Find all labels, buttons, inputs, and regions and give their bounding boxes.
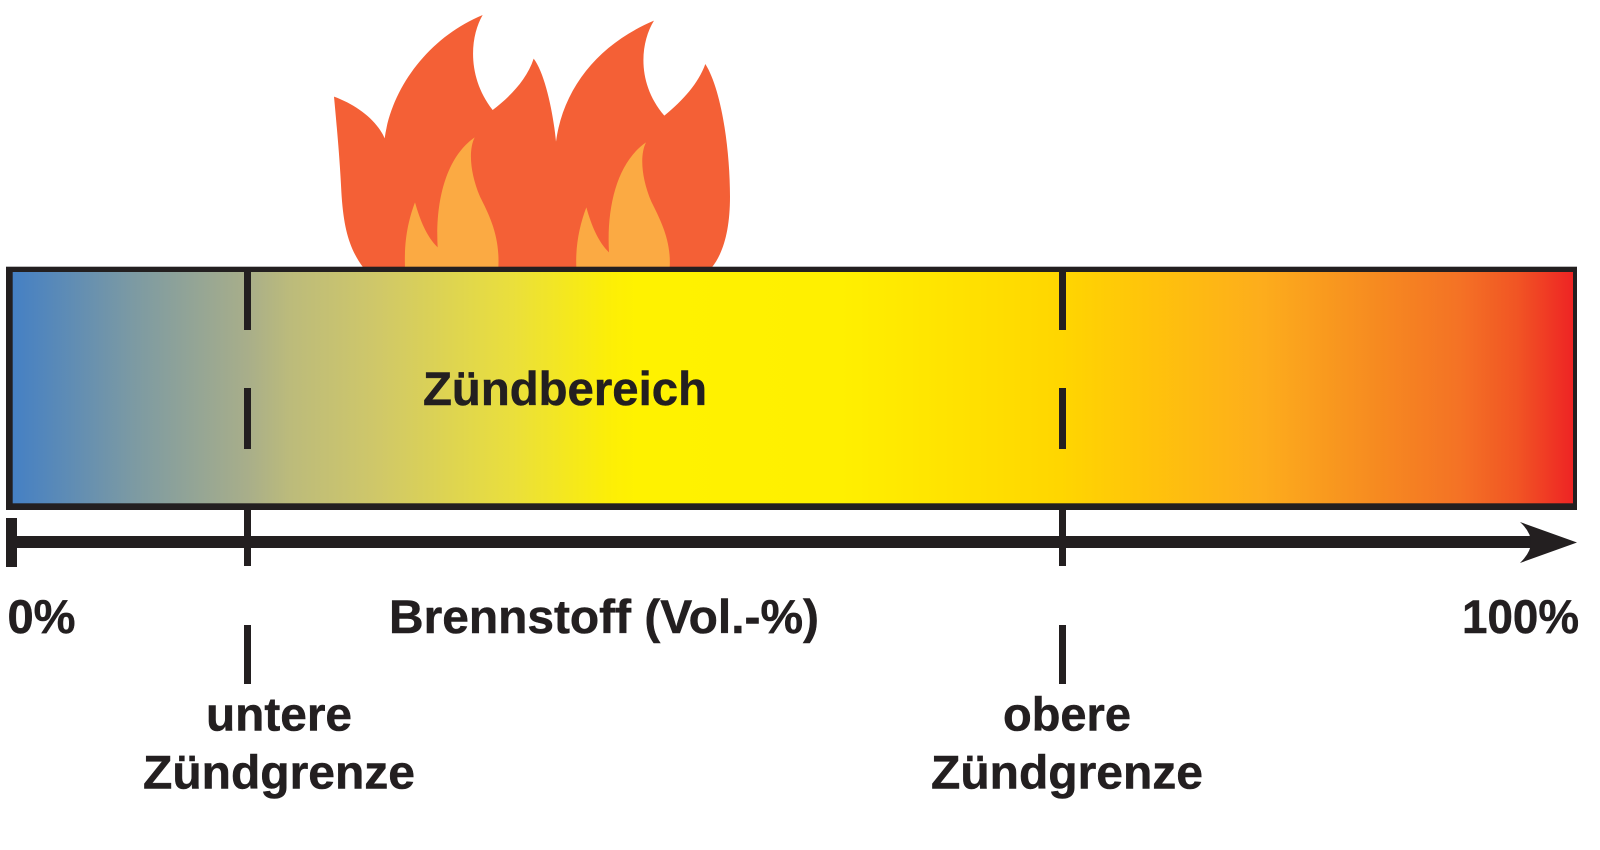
axis title: Brennstoff (Vol.-%) <box>389 590 819 643</box>
label: 100%: 100% <box>1462 590 1579 643</box>
label: Zündbereich: Zündbereich <box>423 362 707 415</box>
gradient bar <box>6 267 1577 510</box>
label: untere Zündgrenze: Zündgrenze <box>143 746 415 798</box>
label: obere Zündgrenze: Zündgrenze <box>931 746 1203 798</box>
icon: flames <box>334 15 730 268</box>
upper limit dashes in bar <box>1059 272 1066 449</box>
axis arrow <box>6 518 1577 567</box>
label: untere Zündgrenze: untere <box>206 688 352 740</box>
lower limit dashes in bar <box>244 272 251 449</box>
tick: upper limit <box>1059 510 1066 684</box>
label: obere Zündgrenze <box>931 688 1203 798</box>
label: untere Zündgrenze <box>143 688 415 798</box>
label: 0%: 0% <box>8 590 76 643</box>
tick: lower limit <box>244 510 251 684</box>
label: obere Zündgrenze: obere <box>1003 688 1131 740</box>
